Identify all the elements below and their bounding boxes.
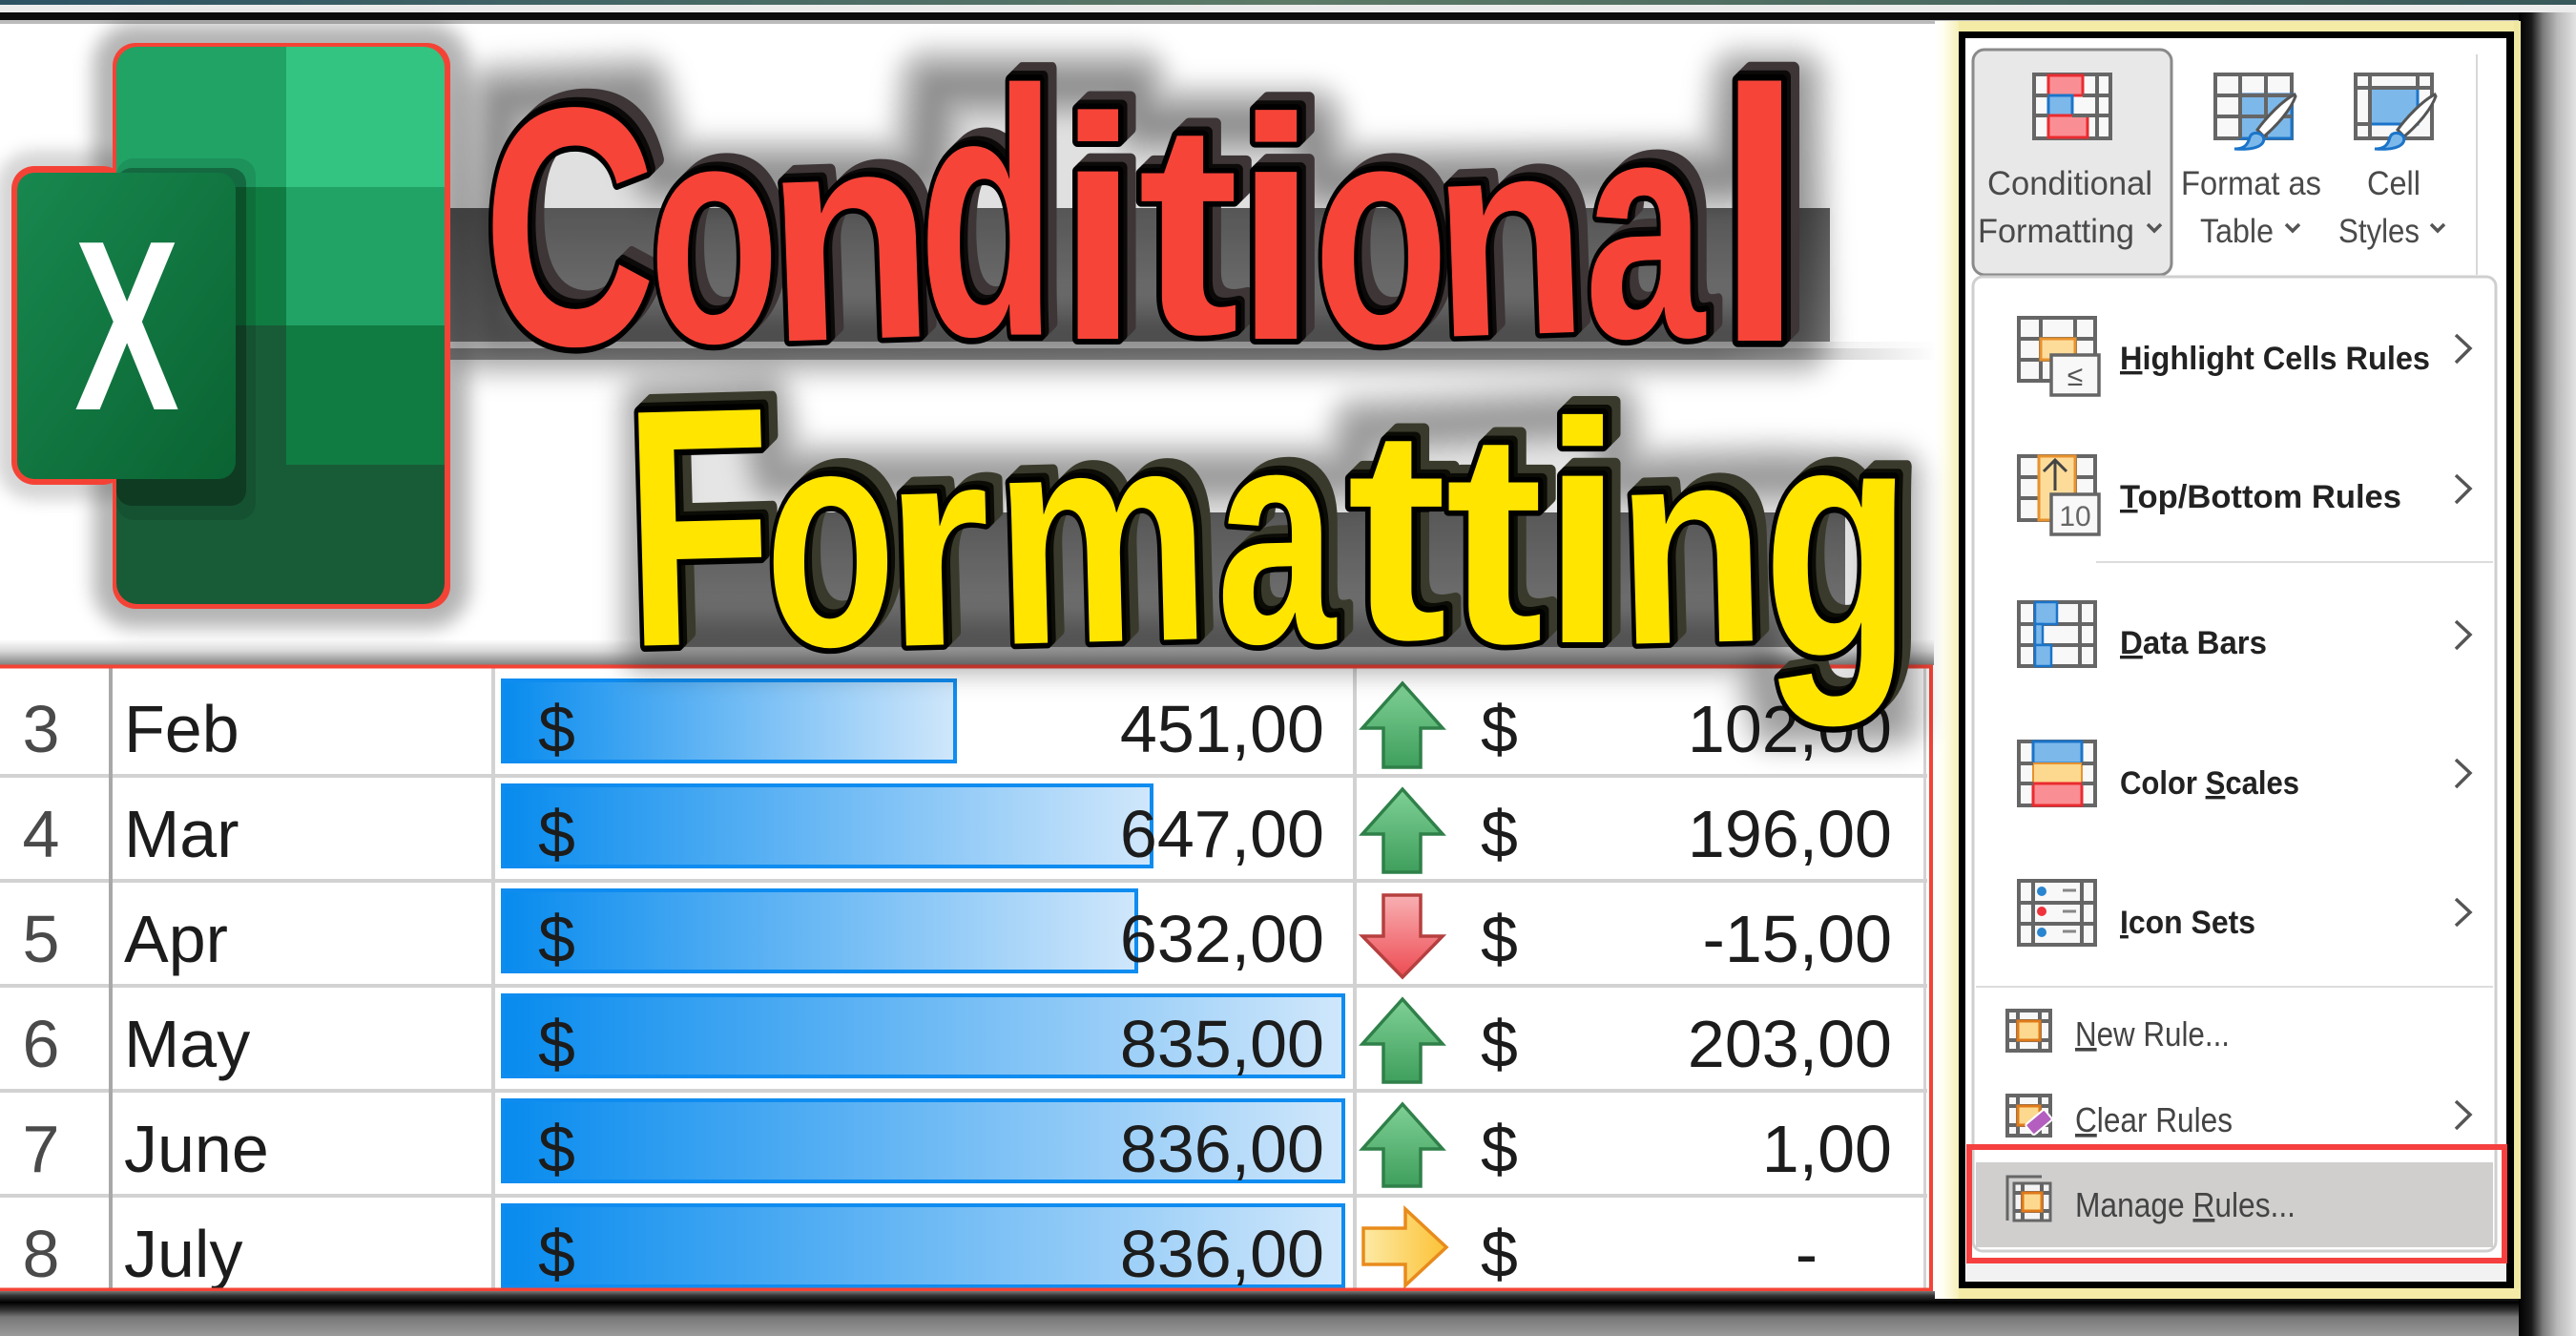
sales values: 835,00 xyxy=(1120,1007,1324,1081)
change values: 203,00 xyxy=(1688,1007,1892,1081)
button label: Cell xyxy=(2367,165,2420,202)
title: Formatting: t xyxy=(1347,365,1447,702)
currency symbols in the change column: $ xyxy=(1481,902,1518,976)
icon: conditional formatting grid xyxy=(2034,74,2110,138)
currency symbols in the bar column: $ xyxy=(538,1007,575,1081)
arrow icon set xyxy=(1362,683,1446,1285)
currency symbols in the change column: $ xyxy=(1481,1217,1518,1291)
currency symbols in the bar column: $ xyxy=(538,797,575,871)
spreadsheet table xyxy=(0,666,1932,1291)
icon: highlight cells: ≤ xyxy=(2067,361,2083,392)
month labels: July xyxy=(124,1217,242,1291)
icon: dropdown chevron xyxy=(2148,224,2161,231)
menu label: Top/Bottom Rules xyxy=(2120,479,2401,515)
title backing band: line one xyxy=(449,208,1946,360)
icon: top and bottom xyxy=(2019,456,2099,534)
month labels: May xyxy=(124,1007,250,1081)
sales values xyxy=(1120,692,1324,1291)
row numbers: 3 xyxy=(23,692,59,766)
top window strip xyxy=(0,0,2576,24)
currency symbols in the change column: $ xyxy=(1481,1112,1518,1186)
change values: 102,00 xyxy=(1688,692,1892,766)
ribbon button: Cell Styles xyxy=(2338,74,2444,250)
title: Formatting: m xyxy=(990,364,1214,709)
ribbon button: Conditional Formatting xyxy=(1973,50,2171,275)
menu label: Clear Rules xyxy=(2075,1100,2233,1139)
button label: Conditional xyxy=(1987,165,2152,202)
icon: top and bottom: 10 xyxy=(2059,501,2091,532)
title backing band: line two xyxy=(0,512,1934,665)
right window shadow xyxy=(2519,12,2576,1336)
button label second line: Formatting xyxy=(1978,213,2134,250)
icon: manage rules xyxy=(2007,1177,2050,1221)
icon: clear rules eraser xyxy=(2007,1096,2052,1136)
menu item: New Rule xyxy=(2007,1011,2230,1054)
title glow: Formatting xyxy=(649,399,1894,720)
title: Conditional: i xyxy=(1057,52,1139,406)
menu label: Icon Sets xyxy=(2120,905,2255,941)
menu item: Data Bars xyxy=(2019,602,2470,666)
change values xyxy=(1688,692,1892,1291)
title: Conditional: t xyxy=(1138,60,1239,398)
menu label: Highlight Cells Rules xyxy=(2120,341,2430,377)
sales values: 836,00 xyxy=(1120,1112,1324,1186)
title: Conditional: o xyxy=(649,56,779,410)
row numbers: 5 xyxy=(23,902,59,976)
title: Formatting: n xyxy=(1613,386,1769,704)
menu item: Icon Sets xyxy=(2019,881,2470,945)
menu label: Manage Rules... xyxy=(2075,1185,2296,1224)
title: Formatting: t xyxy=(1445,369,1544,707)
button label: Format as xyxy=(2181,165,2321,202)
title: Conditional: d xyxy=(919,19,1056,409)
title: Conditional xyxy=(483,16,1803,418)
menu item: Clear Rules xyxy=(2007,1096,2470,1139)
title: Formatting: a xyxy=(1216,362,1337,709)
title: Conditional: a xyxy=(1585,52,1706,404)
sales values: 836,00 xyxy=(1120,1217,1324,1291)
change values: 1,00 xyxy=(1762,1112,1892,1186)
logo letter X: X xyxy=(74,191,179,462)
button label second line: Styles xyxy=(2338,213,2420,250)
icon: submenu arrow xyxy=(2456,621,2470,649)
title: Formatting: o xyxy=(765,361,896,712)
menu item: Highlight Cells Rules xyxy=(2019,318,2470,395)
dropdown menu xyxy=(1969,277,2504,1261)
currency symbols in the change column: $ xyxy=(1481,797,1518,871)
sales values: 632,00 xyxy=(1120,902,1324,976)
currency symbols in the change column: $ xyxy=(1481,692,1518,766)
bottom window shadow xyxy=(0,1291,2538,1336)
row numbers: 8 xyxy=(23,1217,59,1291)
icon: submenu arrow xyxy=(2456,475,2470,503)
icon: dropdown chevron xyxy=(2431,224,2444,231)
month labels xyxy=(124,692,269,1291)
change values: -15,00 xyxy=(1703,902,1892,976)
title: Conditional: n xyxy=(1428,75,1591,398)
sales values: 451,00 xyxy=(1120,692,1324,766)
icon: highlight cells xyxy=(2019,318,2099,395)
currency symbols in the bar column: $ xyxy=(538,902,575,976)
month labels: Feb xyxy=(124,692,239,766)
icon: Excel logo xyxy=(11,43,450,609)
menu label: New Rule... xyxy=(2075,1014,2230,1054)
title: Formatting: F xyxy=(620,336,777,719)
icon: submenu arrow xyxy=(2456,760,2470,787)
currency symbols in the change column xyxy=(1481,692,1518,1291)
currency symbols in the bar column: $ xyxy=(538,1112,575,1186)
title: Formatting: r xyxy=(881,386,995,708)
data bars xyxy=(503,680,1343,1286)
icon: submenu arrow xyxy=(2456,335,2470,363)
title: Conditional: n xyxy=(760,65,939,406)
icon: dropdown chevron xyxy=(2286,224,2299,231)
menu item: Manage Rules highlighted xyxy=(1969,1147,2504,1261)
currency symbols in the bar column: $ xyxy=(538,1217,575,1291)
title: Formatting xyxy=(620,336,1911,729)
change values: 196,00 xyxy=(1688,797,1892,871)
menu label: Color Scales xyxy=(2120,765,2299,802)
change values: - xyxy=(1796,1217,1818,1291)
month labels: Mar xyxy=(124,797,239,871)
icon: submenu arrow xyxy=(2456,1101,2470,1129)
icon: table with paintbrush xyxy=(2215,74,2296,149)
icon: data bars xyxy=(2019,602,2095,666)
icon: icon sets xyxy=(2019,881,2095,945)
title: Formatting: g xyxy=(1763,353,1911,729)
title: Conditional: l xyxy=(1715,16,1803,418)
panel: Excel ribbon menu xyxy=(1959,21,2521,1299)
month labels: June xyxy=(124,1112,269,1186)
row numbers: 6 xyxy=(23,1007,59,1081)
row numbers: 4 xyxy=(23,797,59,871)
ribbon button: Format as Table xyxy=(2181,74,2321,250)
red highlight box xyxy=(1969,1147,2504,1261)
currency symbols in the bar column xyxy=(538,692,575,1291)
icon: color scales xyxy=(2019,741,2095,805)
title glow: Conditional xyxy=(487,81,1798,342)
table rows and cells xyxy=(0,668,1927,1291)
title: Formatting: i xyxy=(1542,358,1624,709)
menu label: Data Bars xyxy=(2120,625,2267,661)
cream frame glow xyxy=(1935,21,1963,1299)
sales values: 647,00 xyxy=(1120,797,1324,871)
logo soft shadow xyxy=(11,43,450,609)
icon: new rule xyxy=(2007,1011,2050,1051)
title: Conditional: i xyxy=(1235,53,1319,406)
currency symbols in the change column: $ xyxy=(1481,1007,1518,1081)
icon: submenu arrow xyxy=(2456,899,2470,926)
menu item: Top/Bottom Rules xyxy=(2019,456,2470,534)
month labels: Apr xyxy=(124,902,228,976)
icon: cell style with paintbrush xyxy=(2356,74,2436,149)
row numbers xyxy=(24,705,57,1277)
title: Conditional: C xyxy=(483,37,655,417)
row numbers: 7 xyxy=(23,1112,59,1186)
button label second line: Table xyxy=(2200,213,2274,250)
title: Conditional: o xyxy=(1314,55,1448,409)
currency symbols in the bar column: $ xyxy=(538,692,575,766)
menu item: Color Scales xyxy=(2019,741,2470,805)
